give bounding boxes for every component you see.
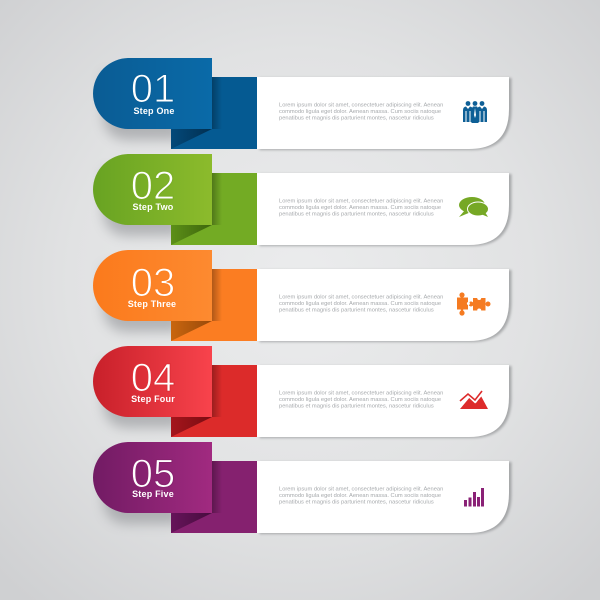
fold band one xyxy=(171,77,257,149)
description four: Lorem ipsum dolor sit amet, consectetuer adipiscing elit. Aenean xyxy=(279,390,443,396)
icon: puzzle pieces xyxy=(457,292,490,316)
icon: speech bubbles xyxy=(459,197,488,217)
description two: commodo ligula eget dolor. Aenean massa. Cum sociis natoque xyxy=(279,205,441,211)
number 03: 03 xyxy=(131,261,175,305)
label step one: Step One xyxy=(133,106,175,116)
description one: penatibus et magnis dis parturient montes, nascetur ridiculus xyxy=(279,116,434,122)
number 01: 01 xyxy=(131,67,175,111)
white text card five xyxy=(257,461,512,534)
icon: line and area chart xyxy=(459,391,488,409)
tab five xyxy=(93,442,212,513)
shadow three xyxy=(103,266,180,332)
shadow four xyxy=(103,362,180,428)
white text card one xyxy=(257,77,512,150)
white text card four xyxy=(257,365,512,438)
label step five: Step Five xyxy=(132,489,174,499)
tab two xyxy=(93,154,212,225)
white text card three xyxy=(257,269,512,342)
label step three: Step Three xyxy=(128,299,176,309)
number 05: 05 xyxy=(131,452,175,496)
panel: step four xyxy=(93,346,512,438)
description three: penatibus et magnis dis parturient montes, nascetur ridiculus xyxy=(279,308,434,314)
description two: Lorem ipsum dolor sit amet, consectetuer adipiscing elit. Aenean xyxy=(279,198,443,204)
description five: Lorem ipsum dolor sit amet, consectetuer adipiscing elit. Aenean xyxy=(279,486,443,492)
panel: step three xyxy=(93,250,512,342)
shadow five xyxy=(103,458,180,524)
shadow one xyxy=(103,74,180,140)
label step two: Step Two xyxy=(133,202,174,212)
shadow two xyxy=(103,170,180,236)
panel: step two xyxy=(93,154,512,246)
number 04: 04 xyxy=(131,356,175,400)
description five: penatibus et magnis dis parturient montes, nascetur ridiculus xyxy=(279,500,434,506)
description two: penatibus et magnis dis parturient montes, nascetur ridiculus xyxy=(279,212,434,218)
tab four xyxy=(93,346,212,417)
panel: step one xyxy=(93,58,512,150)
tab one xyxy=(93,58,212,129)
description five: commodo ligula eget dolor. Aenean massa. Cum sociis natoque xyxy=(279,493,441,499)
fold band five xyxy=(171,461,257,533)
fold band four xyxy=(171,365,257,437)
label step four: Step Four xyxy=(131,394,175,404)
white text card two xyxy=(257,173,512,246)
fold band two xyxy=(171,173,257,245)
panel: step five xyxy=(93,442,512,534)
icon: team xyxy=(463,101,487,123)
icon: bar chart xyxy=(464,488,484,506)
description one: commodo ligula eget dolor. Aenean massa. Cum sociis natoque xyxy=(279,109,441,115)
number 02: 02 xyxy=(131,164,175,208)
description four: commodo ligula eget dolor. Aenean massa. Cum sociis natoque xyxy=(279,397,441,403)
fold band three xyxy=(171,269,257,341)
description three: commodo ligula eget dolor. Aenean massa. Cum sociis natoque xyxy=(279,301,441,307)
description four: penatibus et magnis dis parturient montes, nascetur ridiculus xyxy=(279,404,434,410)
description three: Lorem ipsum dolor sit amet, consectetuer adipiscing elit. Aenean xyxy=(279,294,443,300)
description one: Lorem ipsum dolor sit amet, consectetuer adipiscing elit. Aenean xyxy=(279,102,443,108)
tab three xyxy=(93,250,212,321)
